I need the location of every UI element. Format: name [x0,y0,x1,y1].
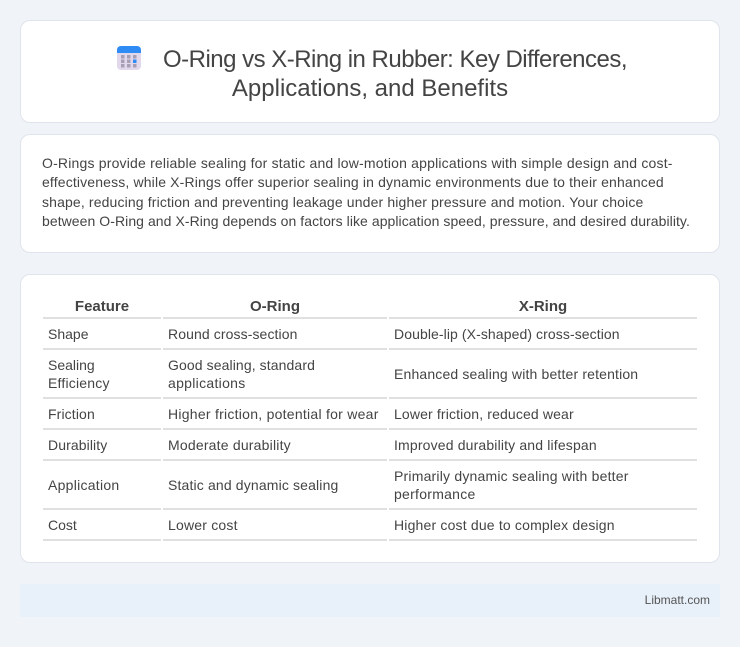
table rows: Efficiency [48,375,110,391]
table rows: Shape [48,326,88,342]
text block: summary: effectiveness, while X-Rings offer superior sealing in dynamic environments due to their enhanced [42,174,664,190]
table rows: Cost [48,517,77,533]
table rows [43,317,697,541]
table rows: Higher friction, potential for wear [168,406,379,422]
table header [75,298,567,315]
footer [20,584,720,616]
table rows: Friction [48,406,95,422]
table rows: performance [394,486,476,502]
table rows: applications [168,375,246,391]
table rows: Durability [48,437,107,453]
footer: Libmatt.com [645,592,710,606]
table rows: Lower friction, reduced wear [394,406,574,422]
table rows: Double-lip (X-shaped) cross-section [394,326,620,342]
text block: summary: O-Rings provide reliable sealing for static and low-motion applications with simple design and cost- [42,155,673,171]
text block: summary [42,155,690,229]
title: Applications, and Benefits [232,75,508,102]
table rows: Round cross-section [168,326,298,342]
text block: summary: between O-Ring and X-Ring depends on factors like application speed, pressure, and desired durability. [42,213,690,229]
panel: comparison table [20,274,720,563]
table rows: Sealing [48,357,95,373]
table header: Feature [75,298,129,315]
table rows: Moderate durability [168,437,291,453]
title: O-Ring vs X-Ring in Rubber: Key Differences, [163,46,627,73]
panel: title card [20,20,720,123]
table rows: Primarily dynamic sealing with better [394,468,629,484]
table rows: Static and dynamic sealing [168,477,338,493]
table header: O-Ring [250,298,300,315]
title [163,46,627,102]
table rows: Enhanced sealing with better retention [394,366,638,382]
table rows: Application [48,477,119,493]
table header: X-Ring [519,298,567,315]
table rows: Good sealing, standard [168,357,315,373]
icon: calendar [117,46,141,70]
table rows: Lower cost [168,517,238,533]
panel: summary paragraph [20,134,720,253]
table rows: Higher cost due to complex design [394,517,615,533]
text block: summary: shape, reducing friction and preventing leakage under higher pressure and motion. Your choice [42,194,643,210]
table rows: Improved durability and lifespan [394,437,597,453]
